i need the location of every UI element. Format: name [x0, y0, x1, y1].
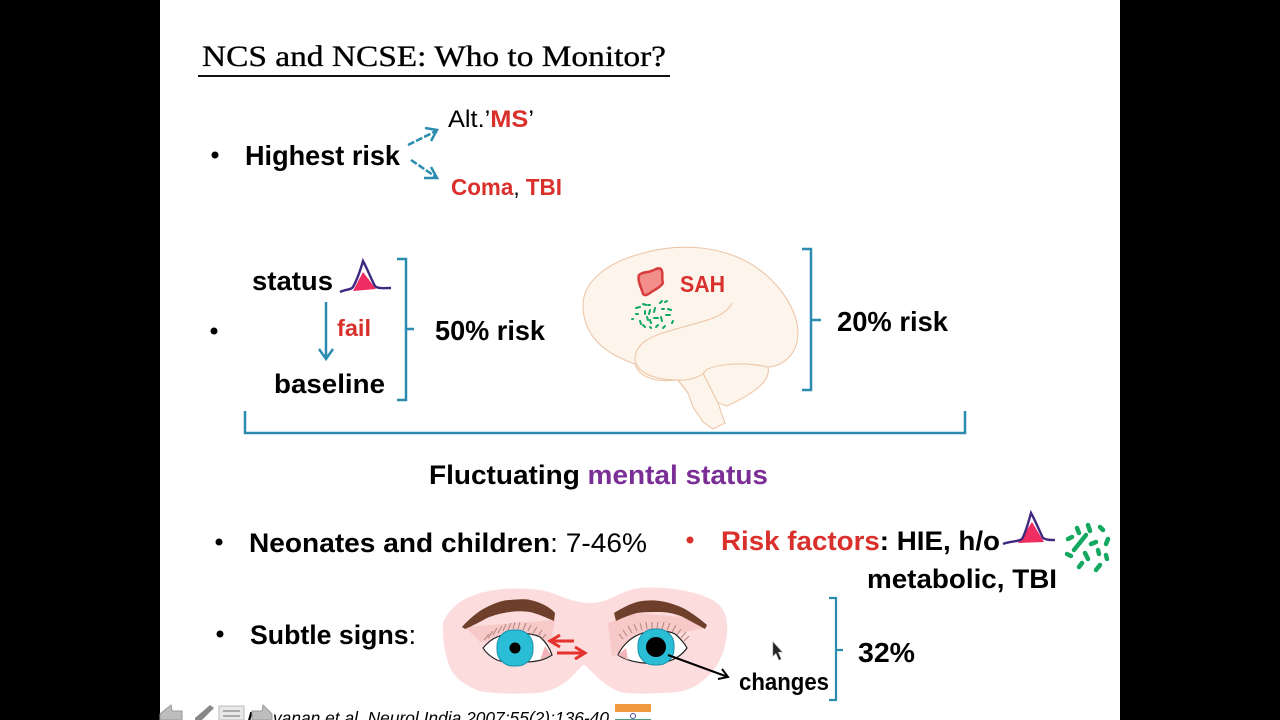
brain illustration: [583, 247, 798, 429]
arrow: to coma and TBI: [411, 160, 437, 178]
arrow: to altered mental status: [408, 128, 437, 145]
icon: India flag: [615, 704, 651, 720]
bracket: 20% risk: 20% risk: [837, 306, 948, 337]
left eye: [483, 622, 552, 666]
highest risk row: [212, 106, 562, 200]
status to baseline group: fail: [337, 315, 371, 341]
eyes illustration: [443, 588, 728, 694]
right brow: [614, 600, 707, 629]
icon: haemorrhage: [639, 268, 663, 295]
label: changes: changes: [739, 669, 829, 696]
risk factors: Risk factors: HIE, h/o: [721, 526, 1000, 556]
subtle signs: Subtle signs:: [250, 620, 416, 650]
label: altered mental status: Alt.’MS’: [448, 106, 534, 133]
arrow: fail: [319, 302, 333, 359]
bracket: 32%: [829, 598, 915, 700]
risk factors: [686, 513, 1108, 594]
status to baseline group: status: [252, 266, 333, 296]
icon: mouse cursor: [773, 642, 782, 660]
neonates and children: Neonates and children : 7-46%: [249, 528, 647, 558]
right eye: [618, 622, 689, 665]
label: coma and TBI: Coma, TBI: [451, 174, 562, 200]
status to baseline group: 50% risk: [435, 315, 545, 346]
icon: green speckles large: [1067, 525, 1108, 570]
arrow: pupil changes: [668, 655, 728, 679]
heading: fluctuating mental status: Fluctuating mental status: [429, 460, 768, 490]
label: SAH: SAH: [680, 271, 725, 297]
left brow: [462, 599, 555, 629]
icon: green speckles: [632, 301, 673, 328]
bracket: 20% risk: [802, 249, 948, 390]
bracket: fluctuating mental status: [245, 411, 965, 433]
bracket: 50% risk: [397, 259, 414, 400]
bracket: 32%: 32%: [858, 637, 915, 668]
risk factors: metabolic, TBI: [867, 564, 1057, 594]
icon: seizure spike: [340, 261, 391, 292]
highest risk row: Highest risk: [245, 140, 400, 171]
title: NCS and NCSE: Who to Monitor?: [202, 40, 666, 73]
status to baseline group: baseline: [274, 369, 385, 399]
slide background: [160, 0, 1120, 720]
arrows: eye deviation: [550, 635, 585, 659]
status to baseline group: [210, 259, 545, 400]
icon: seizure spike small: [1003, 513, 1055, 544]
presentation controls: [160, 705, 272, 720]
